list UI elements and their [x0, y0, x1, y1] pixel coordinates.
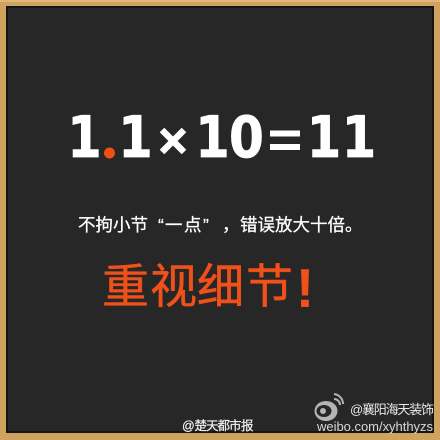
orange headline: 重视细节 — [102, 260, 293, 313]
orange headline: ! — [296, 257, 314, 319]
watermark: left handle: @楚天都市报 — [182, 418, 254, 433]
icon: weibo logo — [314, 394, 343, 421]
title equation: 1 — [67, 104, 102, 171]
title equation: 0 — [229, 104, 264, 171]
title equation: 1 — [307, 104, 341, 171]
orange decimal point — [104, 148, 115, 158]
watermark: weibo url: weibo.com/xyhthyzs — [316, 419, 434, 434]
equals sign — [270, 134, 300, 147]
title equation: 1 — [342, 104, 376, 171]
title equation: 1 — [195, 104, 230, 171]
subtitle: 不拘小节“一点”，错误放大十倍。 — [78, 215, 362, 235]
title equation: 1 — [118, 104, 153, 171]
title equation — [67, 104, 376, 171]
watermark: right handle: @襄阳海天装饰 — [350, 402, 434, 417]
multiply sign — [162, 130, 184, 152]
